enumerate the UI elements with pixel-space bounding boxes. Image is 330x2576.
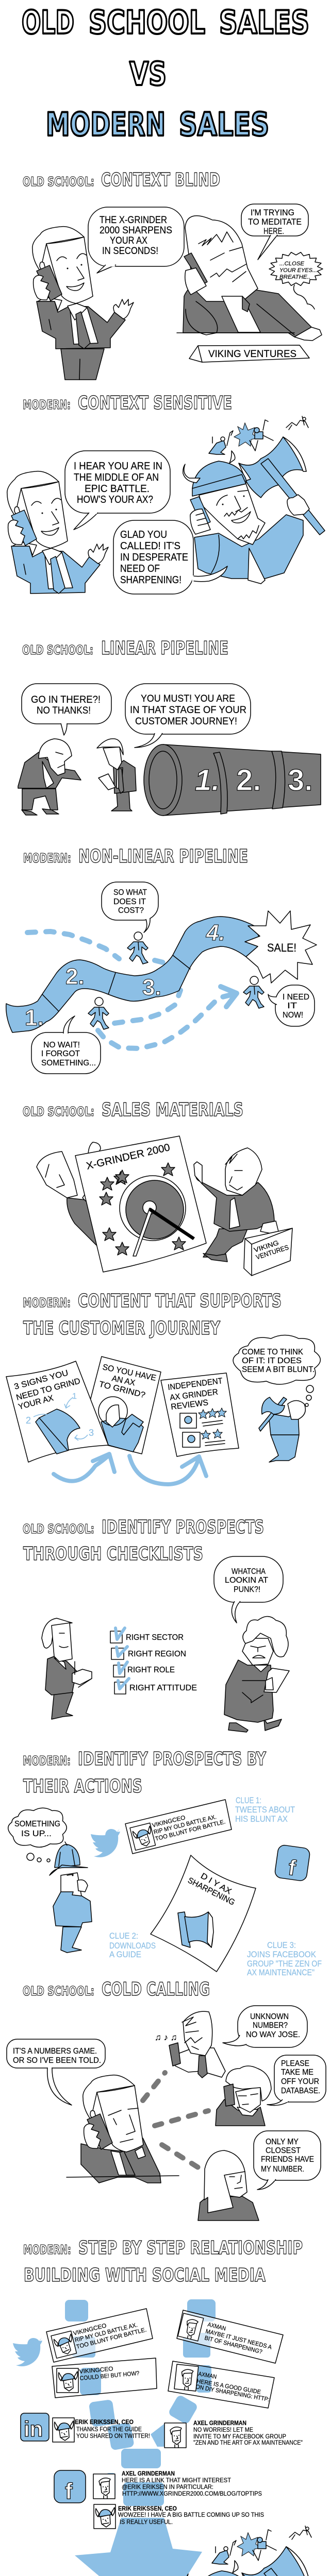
viking at desk on phone xyxy=(177,216,322,341)
tweet: viking ceo, blunt ax: RIP MY OLD BATTLE AX. xyxy=(74,2322,138,2344)
heading: linear pipeline xyxy=(22,638,228,659)
poster: x-grinder 2000 xyxy=(75,1136,206,1272)
speech bubble: need it now xyxy=(268,985,315,1026)
facebook reply: erik: WOWZEE! I HAVE A BIG BATTLE COMING UP SO THIS xyxy=(118,2511,264,2518)
heading: sales materials: SALES MATERIALS xyxy=(102,1099,243,1121)
speech bubble: no thanks xyxy=(22,684,111,735)
speech bubble: x-grinder xyxy=(88,207,184,273)
speech bubble: forgot: I FORGOT xyxy=(41,1049,80,1058)
speech bubble: please take me off xyxy=(267,2055,326,2106)
winding pipeline ribbon xyxy=(6,917,268,1032)
desk sign: viking ventures: VIKING VENTURES xyxy=(208,349,296,360)
clue 1: TWEETS ABOUT xyxy=(235,1805,295,1815)
viking with ax, blue xyxy=(183,416,325,584)
title xyxy=(22,4,309,143)
checklist: RIGHT REGION xyxy=(128,1650,186,1658)
panel: modern social media steps xyxy=(10,2299,328,2576)
viking screening call xyxy=(155,2011,225,2078)
checklist: RIGHT ATTITUDE xyxy=(129,1684,197,1692)
speech bubble: numbers game: OR SO I'VE BEEN TOLD. xyxy=(13,2056,101,2065)
tweet card: viking ceo xyxy=(125,1800,232,1854)
clue 3: JOINS FACEBOOK xyxy=(247,1950,317,1959)
facebook post: axel: @ERIK ERIKSEN IN PARTICULAR: xyxy=(122,2483,213,2490)
clue 3: AX MAINTENANCE" xyxy=(247,1968,315,1977)
heading: identify prospects by their actions: THEIR ACTIONS xyxy=(23,1776,142,1797)
heading: context sensitive: MODERN: xyxy=(23,397,71,412)
thought bubble: something is up xyxy=(8,1808,67,1862)
burst: close your eyes: BREATHE.. xyxy=(279,274,310,280)
paper: so you have an ax xyxy=(90,1357,161,1454)
winding pipeline ribbon: 4. xyxy=(206,920,225,945)
heading: non-linear pipeline xyxy=(23,846,248,867)
linkedin message: erik: THANKS FOR THE GUIDE xyxy=(76,2426,142,2433)
heading: context blind: CONTEXT BLIND xyxy=(101,170,220,191)
icon: twitter bird xyxy=(91,1828,120,1857)
tweet card: viking ceo: VIKINGCEO xyxy=(152,1815,186,1829)
speech bubble: closest friends: MY NUMBER. xyxy=(261,2165,304,2174)
icon: twitter bird xyxy=(13,2337,42,2366)
panel: old school checklists xyxy=(42,1556,289,1732)
speech bubble: customer journey: IN THAT STAGE OF YOUR xyxy=(130,705,246,716)
paper: diy ax sharpening: SHARPENING xyxy=(186,1876,236,1907)
paper: so you have an ax: TO GRIND? xyxy=(98,1380,146,1400)
speech bubble: please take me off: TAKE ME xyxy=(281,2068,314,2077)
pipe with numbered stages: 3. xyxy=(288,764,312,797)
speech bubble: x-grinder: 2000 SHARPENS xyxy=(100,225,172,236)
tweet: axman, guide: AXMAN xyxy=(197,2371,217,2380)
speech bubble: whatcha: PUNK?! xyxy=(234,1585,260,1594)
title: SCHOOL xyxy=(89,4,205,41)
heading: linear pipeline: LINEAR PIPELINE xyxy=(101,638,228,659)
speech bubble: need it now: NOW! xyxy=(283,1011,303,1020)
linkedin message: erik xyxy=(53,2418,150,2442)
linkedin message: erik: ERIK ERIKSSEN, CEO xyxy=(75,2418,134,2426)
tweet: axman, sharpening xyxy=(177,2310,283,2363)
dashed call lines xyxy=(143,2073,208,2168)
facebook post: axel: HTTP://WWW.XGRINDER2000.COM/BLOG/TOPTIPS xyxy=(122,2490,262,2497)
clue 1: CLUE 1: xyxy=(236,1795,261,1805)
panel: old school linear pipeline xyxy=(18,684,321,816)
paper: reviews: REVIEWS xyxy=(170,1398,209,1412)
speech bubble: unknown number: UNKNOWN xyxy=(250,2012,289,2021)
viking with briefcase: VENTURES xyxy=(255,1243,290,1261)
walking customer 3 xyxy=(243,976,264,1008)
heading: context blind xyxy=(23,170,220,191)
speech bubble: please take me off: DATABASE. xyxy=(281,2087,320,2095)
clue 2: CLUE 2: xyxy=(109,1931,138,1941)
speech bubble: forgot: SOMETHING... xyxy=(41,1059,96,1067)
speech bubble: epic battle xyxy=(65,451,170,530)
walking customer 1 xyxy=(127,932,148,964)
heading: identify prospects through checklists xyxy=(23,1517,264,1565)
speech bubble: customer journey: YOU MUST! YOU ARE xyxy=(141,693,235,704)
paper: 3 signs: 1 xyxy=(72,1392,77,1401)
speech bubble: unknown number xyxy=(223,2006,307,2047)
linkedin message: axel: INVITE TO MY FACEBOOK GROUP xyxy=(193,2433,286,2440)
facebook reply: erik: ERIK ERIKSSEN, CEO xyxy=(118,2505,177,2512)
title: SALES xyxy=(219,4,309,41)
burst: sale: SALE! xyxy=(267,941,296,954)
pipe with numbered stages xyxy=(144,744,321,816)
viking with briefcase: VIKING xyxy=(253,1239,279,1254)
panel: modern context sensitive xyxy=(7,416,325,594)
facebook post: axel: AXEL GRINDERMAN xyxy=(122,2470,175,2477)
speech bubble: no thanks: GO IN THERE?! xyxy=(31,694,101,705)
tweet: axman, guide: HERE IS A GOOD GUIDE xyxy=(196,2378,261,2396)
paper: so you have an ax: AN AX xyxy=(111,1374,136,1388)
thought bubble: blunt: SEEM A BIT BLUNT. xyxy=(242,1365,315,1374)
speech bubble: cost: COST? xyxy=(118,906,144,915)
clue 1 xyxy=(235,1795,295,1824)
thought bubble: something is up: IS UP... xyxy=(21,1829,52,1838)
burst: close your eyes: ...CLOSE xyxy=(279,261,305,267)
curly woman on phone xyxy=(216,2066,271,2126)
panel: old school context blind xyxy=(32,204,323,380)
speech bubble: meditate: HERE. xyxy=(263,226,284,236)
speech bubble: desperate need: SHARPENING! xyxy=(120,574,182,586)
grumpy viking pointing xyxy=(18,739,81,815)
title: MODERN xyxy=(46,106,166,143)
thought bubble: something is up: SOMETHING xyxy=(14,1820,60,1828)
speech bubble: epic battle: THE MIDDLE OF AN xyxy=(74,472,159,483)
long-haired woman xyxy=(198,2150,259,2221)
speech bubble: meditate: TO MEDITATE xyxy=(248,217,302,227)
poster: x-grinder 2000: X-GRINDER 2000 xyxy=(85,1142,171,1172)
speech bubble: unknown number: NUMBER? xyxy=(253,2021,288,2030)
speech bubble: cost: DOES IT xyxy=(113,897,146,906)
panel: modern identify by actions xyxy=(8,1795,322,1977)
icon: linkedin: in xyxy=(24,2417,43,2441)
tweet: viking ceo, how: COULD BE! BUT HOW? xyxy=(79,2370,140,2382)
paper: 3 signs: 3 xyxy=(89,1428,94,1438)
paper: reviews xyxy=(161,1373,239,1456)
paper: 3 signs: YOUR AX xyxy=(18,1394,55,1412)
heading: sales materials xyxy=(23,1099,243,1121)
speech bubble: whatcha: LOOKIN AT xyxy=(225,1576,268,1585)
heading: linear pipeline: OLD SCHOOL: xyxy=(22,642,93,657)
speech bubble: whatcha xyxy=(214,1556,283,1623)
speech bubble: desperate need: CALLED! IT'S xyxy=(120,540,180,552)
heading: non-linear pipeline: MODERN: xyxy=(23,851,71,866)
clue 2 xyxy=(109,1931,156,1959)
tweet: viking ceo, blunt ax xyxy=(46,2309,153,2362)
salesman peeking from poster xyxy=(37,1142,101,1247)
speech bubble: closest friends: FRIENDS HAVE xyxy=(261,2155,314,2164)
winding pipeline ribbon: 2. xyxy=(65,964,85,989)
speech bubble: customer journey: CUSTOMER JOURNEY! xyxy=(135,716,237,727)
speech bubble: desperate need xyxy=(113,520,227,594)
speech bubble: desperate need: GLAD YOU xyxy=(120,529,167,540)
tired salesman on phone xyxy=(67,2075,179,2183)
walking customer 2 xyxy=(88,997,109,1029)
winding pipeline ribbon: 1. xyxy=(25,1005,44,1030)
speech bubble: desperate need: IN DESPERATE xyxy=(120,552,188,563)
viking with ax, blue xyxy=(186,2526,328,2576)
burst: sale xyxy=(245,911,317,983)
viking screening call: ♫ ♪ ♫ xyxy=(155,2032,177,2042)
paper: 3 signs: 3 SIGNS YOU xyxy=(13,1368,69,1392)
tweet card: viking ceo: RIP MY OLD BATTLE AX. xyxy=(153,1814,217,1836)
panel: modern non-linear pipeline xyxy=(6,882,317,1074)
dashed detour arrows xyxy=(27,931,237,1048)
tweet card: viking ceo: TOO BLUNT FOR BATTLE. xyxy=(155,1819,226,1842)
speech bubble: whatcha: WHATCHA xyxy=(232,1567,266,1576)
tweet: axman, guide xyxy=(168,2361,274,2408)
clue 2: A GUIDE xyxy=(109,1950,141,1959)
salesman on phone, blue xyxy=(7,471,108,594)
heading: cold calling: COLD CALLING xyxy=(102,1979,210,2000)
heading: context blind: OLD SCHOOL: xyxy=(23,174,94,189)
speech bubble: cost xyxy=(102,882,158,933)
speech bubble: please take me off: OFF YOUR xyxy=(281,2077,319,2086)
icon: facebook xyxy=(54,2470,86,2504)
checklist xyxy=(110,1628,197,1694)
tweet: viking ceo, blunt ax: TOO BLUNT FOR BATTLE. xyxy=(76,2327,147,2350)
big blue path arrow xyxy=(65,2299,216,2576)
paper: diy ax sharpening xyxy=(151,1855,256,1972)
grumpy woman with tablet xyxy=(224,1617,289,1732)
heading: step by step relationship building xyxy=(23,2238,303,2286)
icon: facebook xyxy=(274,1844,310,1882)
heading: identify prospects through checklists: OLD SCHOOL: xyxy=(23,1521,94,1536)
facebook post: axel: HERE IS A LINK THAT MIGHT INTEREST xyxy=(122,2477,232,2484)
salesman on phone xyxy=(32,227,134,380)
speech bubble: epic battle: HOW'S YOUR AX? xyxy=(77,494,153,505)
title: OLD xyxy=(22,4,74,41)
panel: old school cold calling xyxy=(7,2006,326,2221)
speech bubble: closest friends: ONLY MY xyxy=(266,2138,299,2146)
speech bubble: closest friends: CLOSEST xyxy=(266,2146,301,2155)
heading: content that supports the customer journey: MODERN: xyxy=(23,1295,71,1310)
heading: identify prospects through checklists: IDENTIFY PROSPECTS xyxy=(102,1517,264,1538)
speech bubble: closest friends xyxy=(254,2131,321,2190)
heading: content that supports the customer journey xyxy=(23,1291,282,1339)
paper: reviews: INDEPENDENT xyxy=(167,1377,223,1392)
winding pipeline ribbon: 3. xyxy=(142,975,161,1000)
clue 3: CLUE 3: xyxy=(267,1940,296,1950)
paper: 3 signs: NEED TO GRIND xyxy=(15,1377,81,1402)
clue 1: HIS BLUNT AX xyxy=(235,1814,288,1824)
facebook reply: erik xyxy=(94,2504,264,2529)
heading: identify prospects by their actions: IDENTIFY PROSPECTS BY xyxy=(78,1749,267,1770)
speech bubble: forgot xyxy=(31,1016,101,1074)
heading: step by step relationship building: MODERN: xyxy=(23,2242,71,2257)
salesman with notepad xyxy=(42,1618,92,1719)
icon: facebook: f xyxy=(287,1855,298,1880)
heading: identify prospects by their actions xyxy=(23,1749,267,1797)
clue 3 xyxy=(247,1940,322,1977)
heading: cold calling xyxy=(23,1979,210,2000)
speech bubble: customer journey xyxy=(125,684,251,748)
detective salesman xyxy=(50,1842,92,1953)
panel: old school sales materials xyxy=(37,1136,292,1276)
paper: diy ax sharpening: D I Y AX xyxy=(199,1872,233,1896)
paper: 3 signs: 2 xyxy=(26,1415,31,1426)
speech bubble: meditate: I'M TRYING xyxy=(251,208,294,217)
desk sign: viking ventures xyxy=(189,345,309,362)
icon: linkedin xyxy=(21,2413,49,2441)
linkedin message: axel: NO WORRIES! LET ME xyxy=(193,2426,253,2433)
linkedin message: erik: YOU SHARED ON TWITTER! xyxy=(76,2432,150,2439)
linkedin message: axel: "ZEN AND THE ART OF AX MAINTENANCE" xyxy=(193,2439,303,2446)
speech bubble: numbers game: IT'S A NUMBERS GAME. xyxy=(13,2047,97,2056)
speech bubble: x-grinder: YOUR AX xyxy=(110,235,147,246)
facebook reply: erik: IS REALLY USEFUL. xyxy=(120,2518,173,2526)
salesman with note xyxy=(97,739,136,811)
journey arrows xyxy=(54,1454,206,1484)
speech bubble: meditate xyxy=(241,204,308,260)
pipe with numbered stages: 1. xyxy=(195,764,220,797)
icon: facebook: f xyxy=(65,2479,73,2504)
thought bubble: blunt xyxy=(233,1335,320,1406)
panel: modern content xyxy=(6,1335,320,1484)
clue 2: DOWNLOADS xyxy=(109,1941,156,1951)
pipe with numbered stages: 2. xyxy=(236,764,261,797)
speech bubble: unknown number: NO WAY JOSE. xyxy=(246,2030,300,2039)
tweet: viking ceo, how: VIKINGCEO xyxy=(79,2366,113,2375)
tweet: axman, sharpening: MAYBE IT JUST NEEDS A xyxy=(205,2328,273,2351)
viking inspecting ax xyxy=(259,1397,305,1462)
viking with briefcase xyxy=(194,1148,292,1276)
speech bubble: x-grinder: THE X-GRINDER xyxy=(100,215,167,226)
speech bubble: need it now: I NEED xyxy=(283,993,309,1002)
tweet: axman, sharpening: AXMAN xyxy=(207,2321,226,2332)
checklist: RIGHT SECTOR xyxy=(126,1633,184,1642)
paper: so you have an ax: SO YOU HAVE xyxy=(102,1363,157,1383)
heading: identify prospects by their actions: MODERN: xyxy=(23,1753,71,1768)
speech bubble: numbers game xyxy=(7,2039,105,2105)
thought bubble: blunt: OF IT: IT DOES xyxy=(242,1357,302,1365)
heading: sales materials: OLD SCHOOL: xyxy=(23,1104,94,1119)
speech bubble: x-grinder: IN SECONDS! xyxy=(102,246,158,257)
linkedin message: axel: AXEL GRINDERMAN xyxy=(193,2419,246,2427)
burst: close your eyes: YOUR EYES... xyxy=(279,267,317,274)
heading: cold calling: OLD SCHOOL: xyxy=(23,1984,94,1998)
title: SALES xyxy=(179,106,269,143)
thought bubble: blunt: COME TO THINK xyxy=(242,1348,303,1357)
heading: identify prospects through checklists: THROUGH CHECKLISTS xyxy=(23,1544,203,1565)
speech bubble: desperate need: NEED OF xyxy=(120,563,160,574)
paper: reviews: AX GRINDER xyxy=(169,1388,219,1402)
speech bubble: cost: SO WHAT xyxy=(113,888,147,897)
tweet: viking ceo, blunt ax: VIKINGCEO xyxy=(73,2323,107,2337)
speech bubble: please take me off: PLEASE xyxy=(281,2059,309,2068)
title: VS xyxy=(129,55,167,93)
speech bubble: no thanks: NO THANKS! xyxy=(37,705,91,716)
heading: content that supports the customer journey: THE CUSTOMER JOURNEY xyxy=(23,1318,221,1339)
burst: close your eyes xyxy=(269,252,323,309)
speech bubble: epic battle: I HEAR YOU ARE IN xyxy=(74,461,162,472)
paper: 3 signs xyxy=(6,1361,108,1462)
facebook post: axel xyxy=(93,2470,262,2499)
tweet: axman, guide: ON DIY SHARPENING: HTTP: xyxy=(195,2384,270,2403)
heading: context sensitive: CONTEXT SENSITIVE xyxy=(78,393,232,414)
speech bubble: forgot: NO WAIT! xyxy=(43,1041,80,1049)
heading: context sensitive xyxy=(23,393,232,414)
linkedin message: axel xyxy=(164,2419,303,2448)
heading: non-linear pipeline: NON-LINEAR PIPELINE xyxy=(78,846,248,867)
speech bubble: need it now: IT xyxy=(287,1002,297,1010)
tweet: axman, sharpening: BIT OF SHARPENING? xyxy=(204,2335,263,2355)
checklist: RIGHT ROLE xyxy=(127,1666,175,1674)
speech bubble: epic battle: EPIC BATTLE. xyxy=(85,483,150,495)
tweet: viking ceo, how xyxy=(52,2358,157,2398)
